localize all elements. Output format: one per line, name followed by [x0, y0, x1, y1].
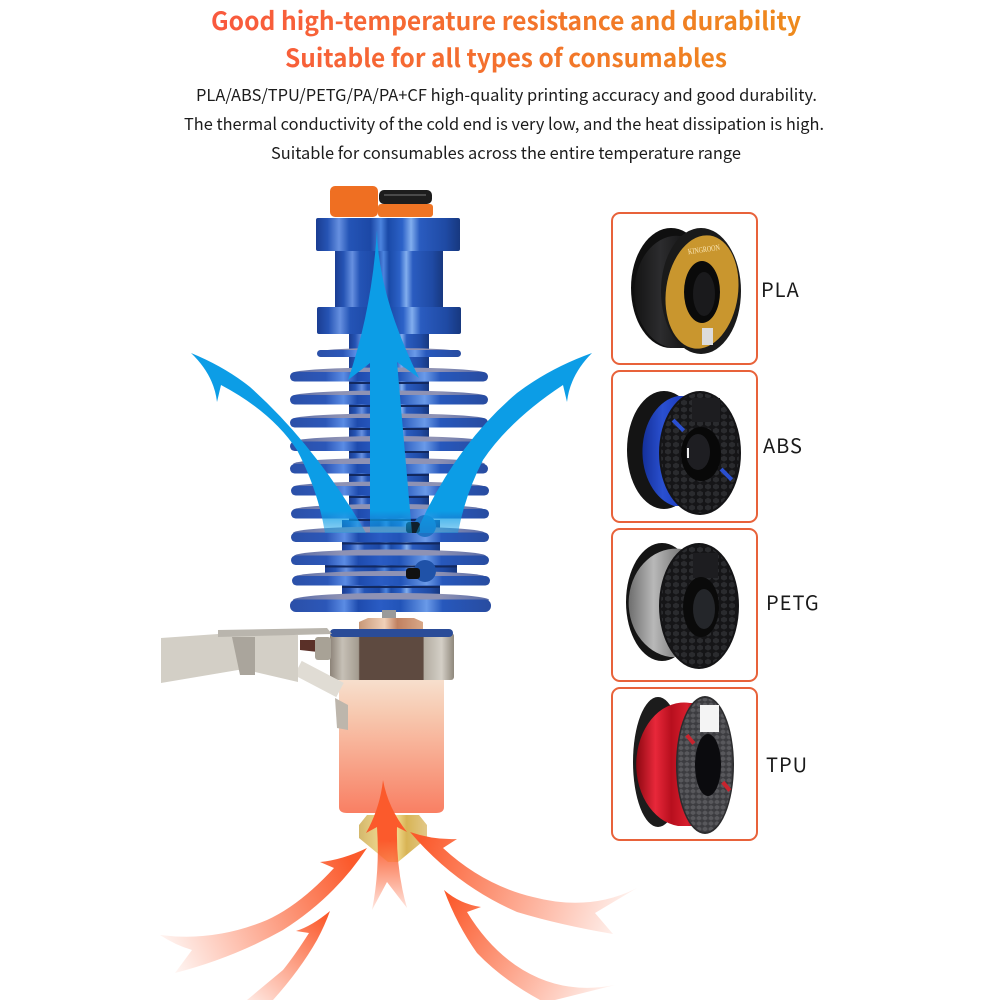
- TPU label: TPU: [766, 749, 808, 778]
- set screws: [406, 515, 436, 582]
- brass nozzle: [359, 815, 427, 862]
- panel: TPU spool: [612, 688, 808, 840]
- arrow: right big red: [410, 832, 637, 934]
- throat pins: [382, 610, 396, 620]
- heater block assembly: [161, 610, 454, 862]
- description text: The thermal conductivity of the cold end is very low, and the heat dissipation is high.: [184, 111, 824, 135]
- description text: [184, 82, 824, 164]
- copper nut: [359, 618, 423, 634]
- panel: PLA spool: [612, 213, 800, 364]
- upper heatsink barrel: [316, 218, 461, 610]
- insulated hot section: [339, 680, 444, 813]
- arrow: centre red: [366, 780, 407, 910]
- panel: PETG spool: [612, 529, 820, 681]
- brass nozzle: 4: [384, 826, 393, 847]
- arrow: left small red: [247, 911, 330, 1000]
- orange coupler clip: [330, 186, 433, 217]
- arrow: left big red: [160, 848, 367, 973]
- heater cable strap: [161, 628, 348, 730]
- description text: PLA/ABS/TPU/PETG/PA/PA+CF high-quality printing accuracy and good durability.: [196, 82, 817, 106]
- heat intake arrows: [160, 780, 637, 1000]
- title: [211, 2, 802, 75]
- PLA spool image: KINGROON: [687, 243, 721, 256]
- ABS label: ABS: [763, 430, 803, 459]
- arrow: right small red: [444, 890, 615, 1000]
- arrow: centre blue: [348, 230, 419, 533]
- panel: ABS spool: [612, 371, 803, 522]
- arrow: left blue: [191, 353, 366, 533]
- ABS spool image: [627, 391, 741, 515]
- title: Good high-temperature resistance and durability: [211, 2, 802, 38]
- arrow: right blue: [416, 353, 592, 533]
- title: Suitable for all types of consumables: [285, 39, 727, 75]
- hotend heatsink: [290, 186, 491, 612]
- PLA spool image: [631, 228, 746, 354]
- TPU spool image: [633, 696, 734, 834]
- heat dissipation arrows: [191, 230, 592, 533]
- silver heater sleeve: [330, 629, 454, 680]
- PLA label: PLA: [761, 274, 800, 303]
- PETG spool image: [626, 543, 739, 669]
- PETG label: PETG: [766, 587, 820, 616]
- description text: Suitable for consumables across the entire temperature range: [271, 140, 741, 164]
- cooling fins: [290, 348, 491, 612]
